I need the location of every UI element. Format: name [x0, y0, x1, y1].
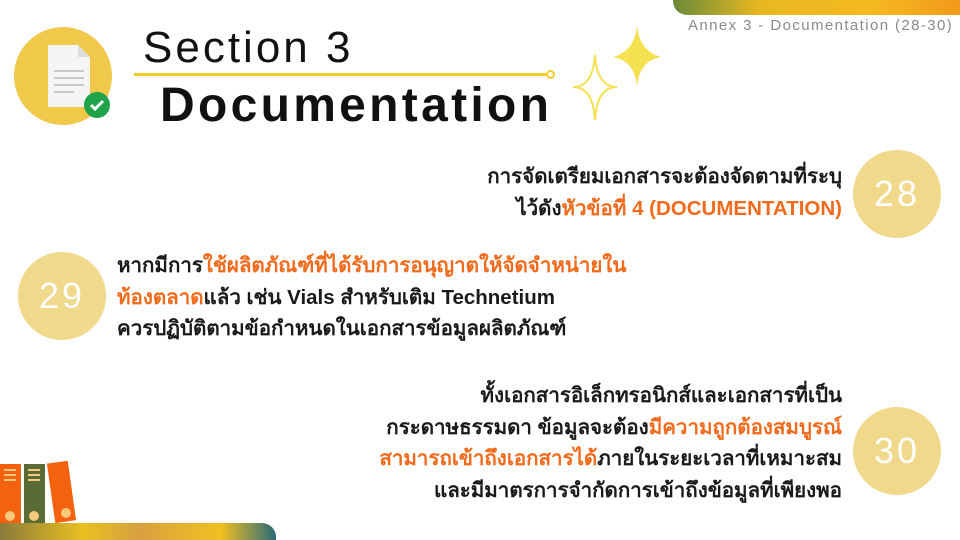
- icon: sparkles: [573, 25, 661, 120]
- item 30 text: กระดาษธรรมดา ข้อมูลจะต้องมีความถูกต้องสมบูรณ์: [386, 416, 842, 438]
- icon: binders: [0, 460, 76, 523]
- annex label: Annex 3 - Documentation (28-30): [688, 17, 953, 34]
- circle 28: [853, 150, 941, 238]
- circle 30: [853, 407, 941, 495]
- title line: [134, 73, 548, 76]
- item 30 text: [379, 380, 842, 503]
- item 28 text: การจัดเตรียมเอกสารจะต้องจัดตามที่ระบุ: [487, 165, 842, 188]
- circle 29: [18, 252, 106, 340]
- bottom strip: [0, 523, 276, 540]
- item 30 text: สามารถเข้าถึงเอกสารได้ภายในระยะเวลาที่เหมาะสม: [379, 447, 842, 470]
- title: Section 3: Section 3: [143, 23, 353, 72]
- item 30 text: ทั้งเอกสารอิเล็กทรอนิกส์และเอกสารที่เป็น: [481, 384, 842, 407]
- item 29 text: ท้องตลาดแล้ว เช่น Vials สำหรับเติม Technetium: [117, 286, 555, 308]
- item 29 text: [117, 250, 626, 341]
- top right banner: [673, 0, 960, 15]
- title: Documentation: Documentation: [160, 79, 552, 132]
- item 28 text: [487, 162, 842, 220]
- item 29 text: หากมีการใช้ผลิตภัณฑ์ที่ได้รับการอนุญาตให้จัดจำหน่ายใน: [117, 254, 626, 277]
- item 30 text: และมีมาตรการจำกัดการเข้าถึงข้อมูลที่เพียงพอ: [434, 478, 842, 502]
- icon: document circle: [14, 27, 112, 125]
- circle 29: 29: [39, 275, 85, 316]
- item 28 text: ไว้ดังหัวข้อที่ 4 (DOCUMENTATION): [516, 196, 842, 220]
- circle 30: 30: [874, 430, 920, 471]
- circle 28: 28: [874, 173, 920, 214]
- item 29 text: ควรปฏิบัติตามข้อกำหนดในเอกสารข้อมูลผลิตภัณฑ์: [117, 317, 566, 340]
